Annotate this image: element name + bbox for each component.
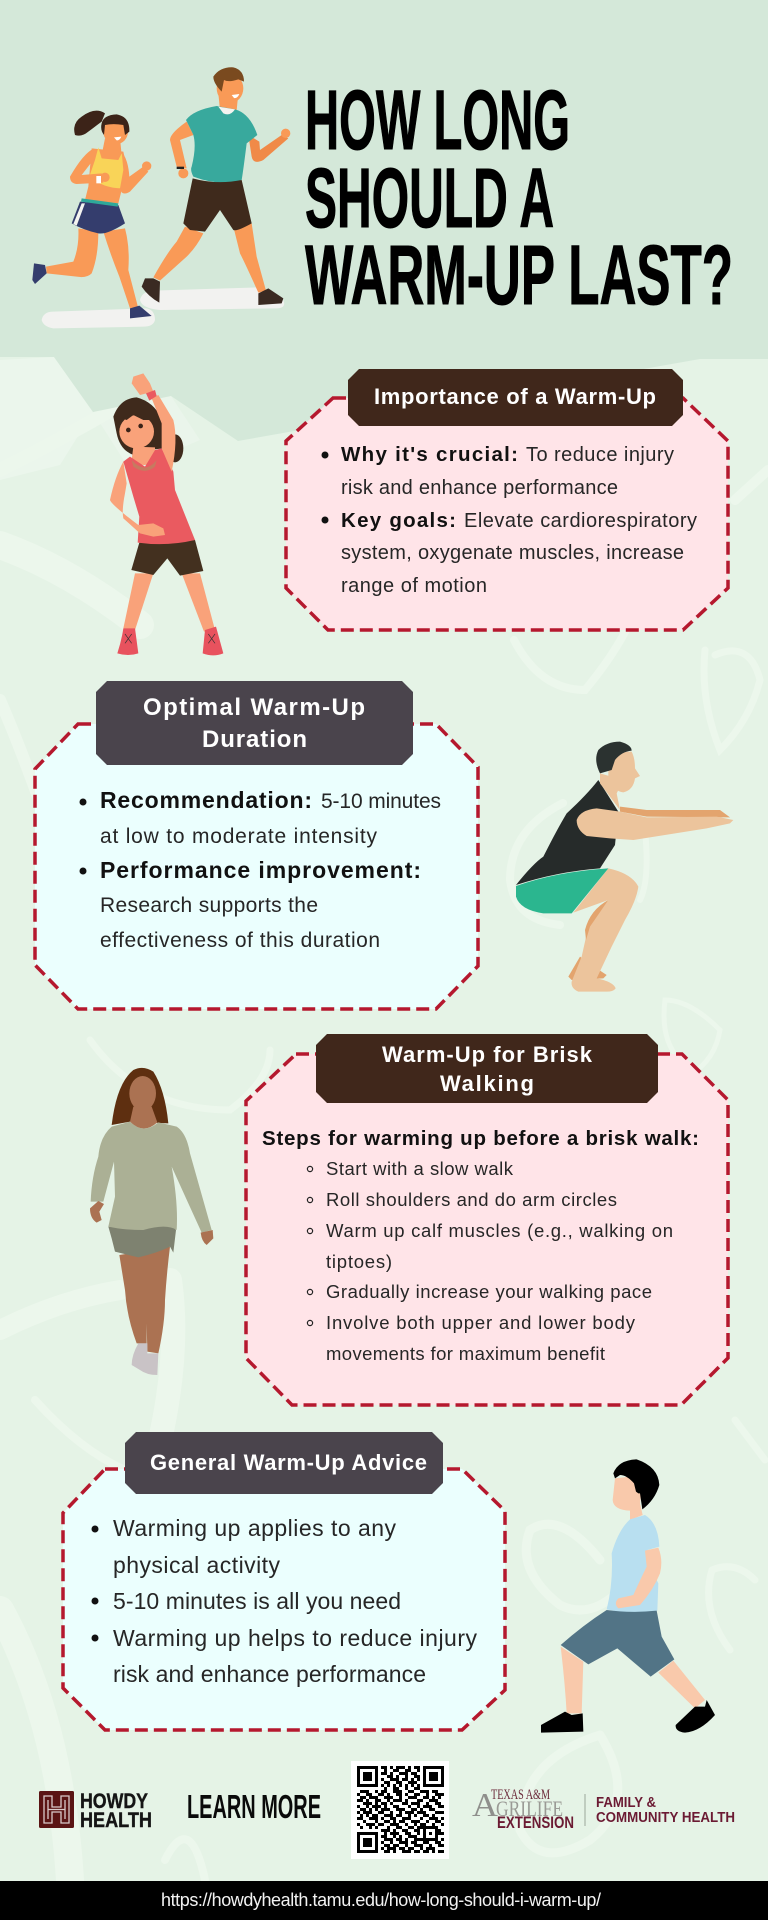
panel text: Gradually increase your walking pace (326, 1281, 652, 1302)
panel text: system, oxygenate muscles, increase (341, 542, 684, 564)
icon: boy lunging (541, 1459, 715, 1733)
panel text (322, 443, 697, 597)
icon: woman stretching (110, 373, 223, 655)
panel text: Warming up helps to reduce injury (113, 1625, 478, 1651)
panel text: Elevate cardiorespiratory (464, 510, 697, 532)
panel heading: Importance of a Warm-Up (374, 384, 656, 409)
footer bar with url (0, 1881, 768, 1920)
panel text (80, 787, 441, 952)
panel: general warm-up advice (63, 1432, 505, 1730)
panel: importance of a warm-up (286, 369, 728, 630)
icon: two runners (32, 67, 290, 328)
panel heading: Warm-Up for Brisk (382, 1042, 593, 1067)
header band (0, 0, 768, 441)
panel heading: Optimal Warm-Up (143, 694, 365, 721)
panel heading (348, 369, 683, 426)
panel text: Recommendation: (100, 787, 312, 813)
panel text: Research supports the (100, 894, 318, 917)
panel: warm-up for brisk walking (246, 1034, 728, 1405)
panel text: risk and enhance performance (113, 1661, 426, 1687)
panel heading (125, 1432, 443, 1494)
logo: Howdy Health: HEALTH (80, 1808, 152, 1832)
panel text: Key goals: (341, 509, 456, 532)
panel text: Start with a slow walk (326, 1158, 514, 1179)
panel text: Warm up calf muscles (e.g., walking on (326, 1220, 673, 1241)
logo: Texas A&M AgriLife Extension: TEXAS A&M (491, 1787, 550, 1803)
panel text: Roll shoulders and do arm circles (326, 1189, 617, 1210)
panel heading: Duration (202, 726, 307, 753)
panel: optimal warm-up duration (35, 681, 478, 1009)
panel text: To reduce injury (526, 444, 674, 466)
logo: Texas A&M AgriLife Extension: A (472, 1787, 498, 1824)
logo: Howdy Health (39, 1789, 152, 1832)
logo: Howdy Health: HOWDY (80, 1789, 148, 1813)
learn more label: LEARN MORE (187, 1788, 321, 1825)
panel text: tiptoes) (326, 1251, 392, 1272)
panel text: risk and enhance performance (341, 477, 618, 499)
panel text (262, 1127, 699, 1364)
panel heading (96, 681, 413, 765)
logo: Texas A&M AgriLife Extension: GRILIFE (496, 1796, 563, 1821)
panel text: physical activity (113, 1552, 280, 1578)
logo: Texas A&M AgriLife Extension: COMMUNITY HEALTH (596, 1810, 735, 1826)
logo: Texas A&M AgriLife Extension (472, 1787, 735, 1832)
logo: Texas A&M AgriLife Extension: EXTENSION (497, 1814, 574, 1832)
panel text: range of motion (341, 575, 487, 597)
panel background (63, 1469, 505, 1730)
panel text: 5-10 minutes is all you need (113, 1588, 401, 1614)
icon: man squatting (516, 742, 733, 992)
title: HOW LONG (305, 73, 570, 167)
panel text (92, 1515, 478, 1687)
panel text: Why it's crucial: (341, 443, 518, 466)
panel text: Steps for warming up before a brisk walk: (262, 1127, 699, 1150)
panel heading (316, 1034, 658, 1103)
panel background (246, 1054, 728, 1405)
panel text: Involve both upper and lower body (326, 1312, 636, 1333)
panel text: Warming up applies to any (113, 1515, 396, 1541)
panel background (286, 398, 728, 630)
panel heading: Walking (440, 1071, 534, 1096)
logo: Texas A&M AgriLife Extension: FAMILY & (596, 1795, 656, 1811)
panel heading: General Warm-Up Advice (150, 1450, 427, 1475)
title: SHOULD A (305, 151, 554, 245)
title (305, 73, 733, 322)
panel text: 5-10 minutes (321, 790, 441, 813)
panel text: at low to moderate intensity (100, 825, 378, 848)
icon: woman walking (90, 1068, 213, 1375)
footer bar with url: https://howdyhealth.tamu.edu/how-long-should-i-warm-up/ (161, 1890, 601, 1910)
panel background (35, 724, 478, 1009)
panel text: movements for maximum benefit (326, 1343, 605, 1364)
panel text: Performance improvement: (100, 857, 421, 883)
QR code (351, 1761, 449, 1859)
panel text: effectiveness of this duration (100, 929, 380, 952)
